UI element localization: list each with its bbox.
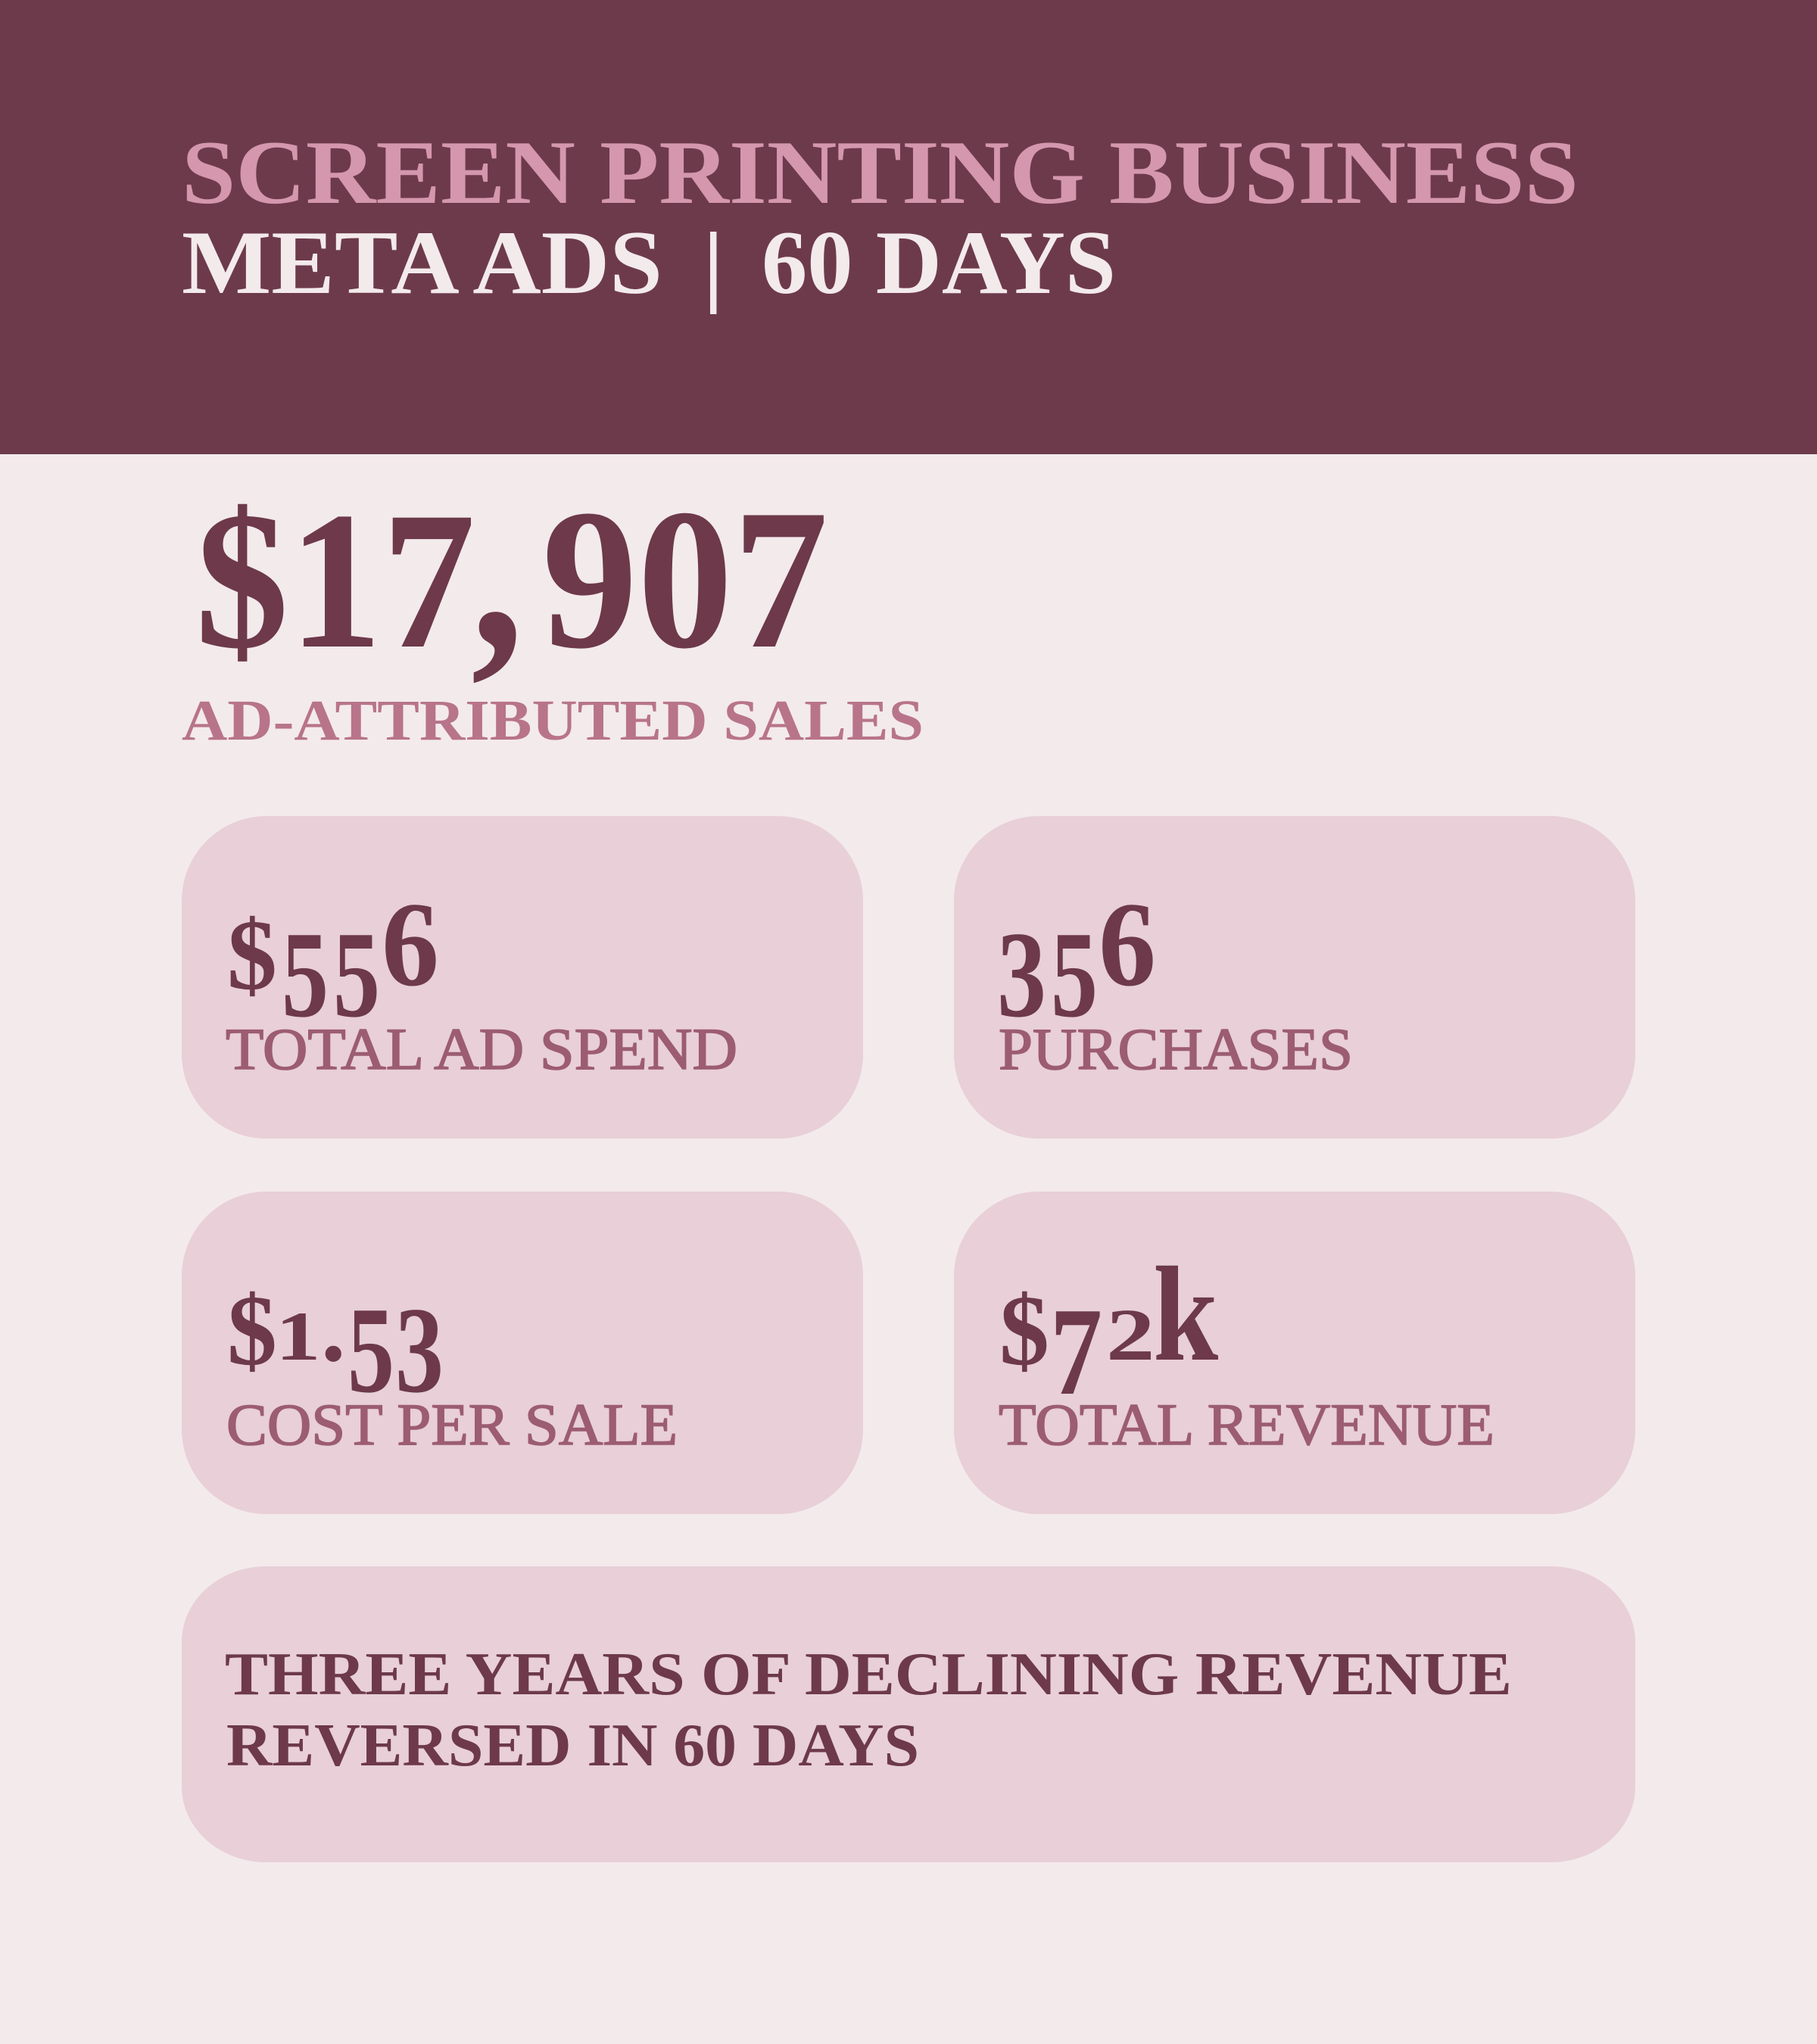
- hero number: [195, 438, 828, 698]
- value: $1.53: $: [227, 1275, 277, 1386]
- header band: [0, 0, 1817, 454]
- value: $72k: 7: [1050, 1282, 1102, 1422]
- label: total revenue: TOTAL REVENUE: [999, 1391, 1494, 1457]
- panel: total ad spend: [182, 816, 863, 1139]
- value: $1.53: 3: [395, 1281, 444, 1419]
- panel: conclusion: [182, 1566, 1635, 1862]
- value: $1.53: 5: [348, 1282, 394, 1419]
- value: $556: 5: [282, 907, 329, 1043]
- hero number: 907: [542, 469, 828, 690]
- hero label: AD-ATTRIBUTED SALES: [182, 689, 924, 752]
- value: $72k: $: [999, 1275, 1049, 1386]
- title line 2: [182, 212, 1116, 314]
- label: cost per sale: COST PER SALE: [226, 1391, 678, 1457]
- value: 356: 5: [1051, 907, 1098, 1043]
- value: $556: 5: [333, 907, 380, 1043]
- value: 356: 6: [1099, 877, 1156, 1011]
- value: $1.53: [227, 1273, 444, 1419]
- label: total ad spend: TOTAL AD SPEND: [226, 1016, 737, 1082]
- label: purchases: PURCHASES: [999, 1016, 1353, 1082]
- hero number: ,: [471, 438, 524, 698]
- panel: cost per sale: [182, 1192, 863, 1514]
- value: $72k: k: [1153, 1240, 1218, 1390]
- title line 1: SCREEN PRINTING BUSINESS: [182, 122, 1579, 223]
- value: $72k: [999, 1240, 1218, 1422]
- conclusion line 1: THREE YEARS OF DECLINING REVENUE: [225, 1641, 1512, 1708]
- value: 356: [997, 877, 1156, 1043]
- hero stat: [182, 438, 924, 752]
- value: $1.53: 1: [276, 1298, 321, 1376]
- value: $1.53: .: [321, 1273, 345, 1382]
- title line 2: |: [703, 213, 723, 314]
- value: $72k: 2: [1106, 1294, 1155, 1376]
- value: $556: 6: [382, 877, 439, 1011]
- conclusion line 2: REVERSED IN 60 DAYS: [226, 1712, 919, 1779]
- title line 2: 60 DAYS: [762, 212, 1116, 313]
- value: 356: 3: [997, 906, 1046, 1042]
- value: $556: $: [227, 899, 277, 1011]
- title line 2: META ADS: [182, 212, 662, 313]
- value: $556: [227, 877, 439, 1043]
- hero number: $17: [195, 472, 475, 690]
- panel: total revenue: [954, 1192, 1635, 1514]
- panel: purchases: [954, 816, 1635, 1139]
